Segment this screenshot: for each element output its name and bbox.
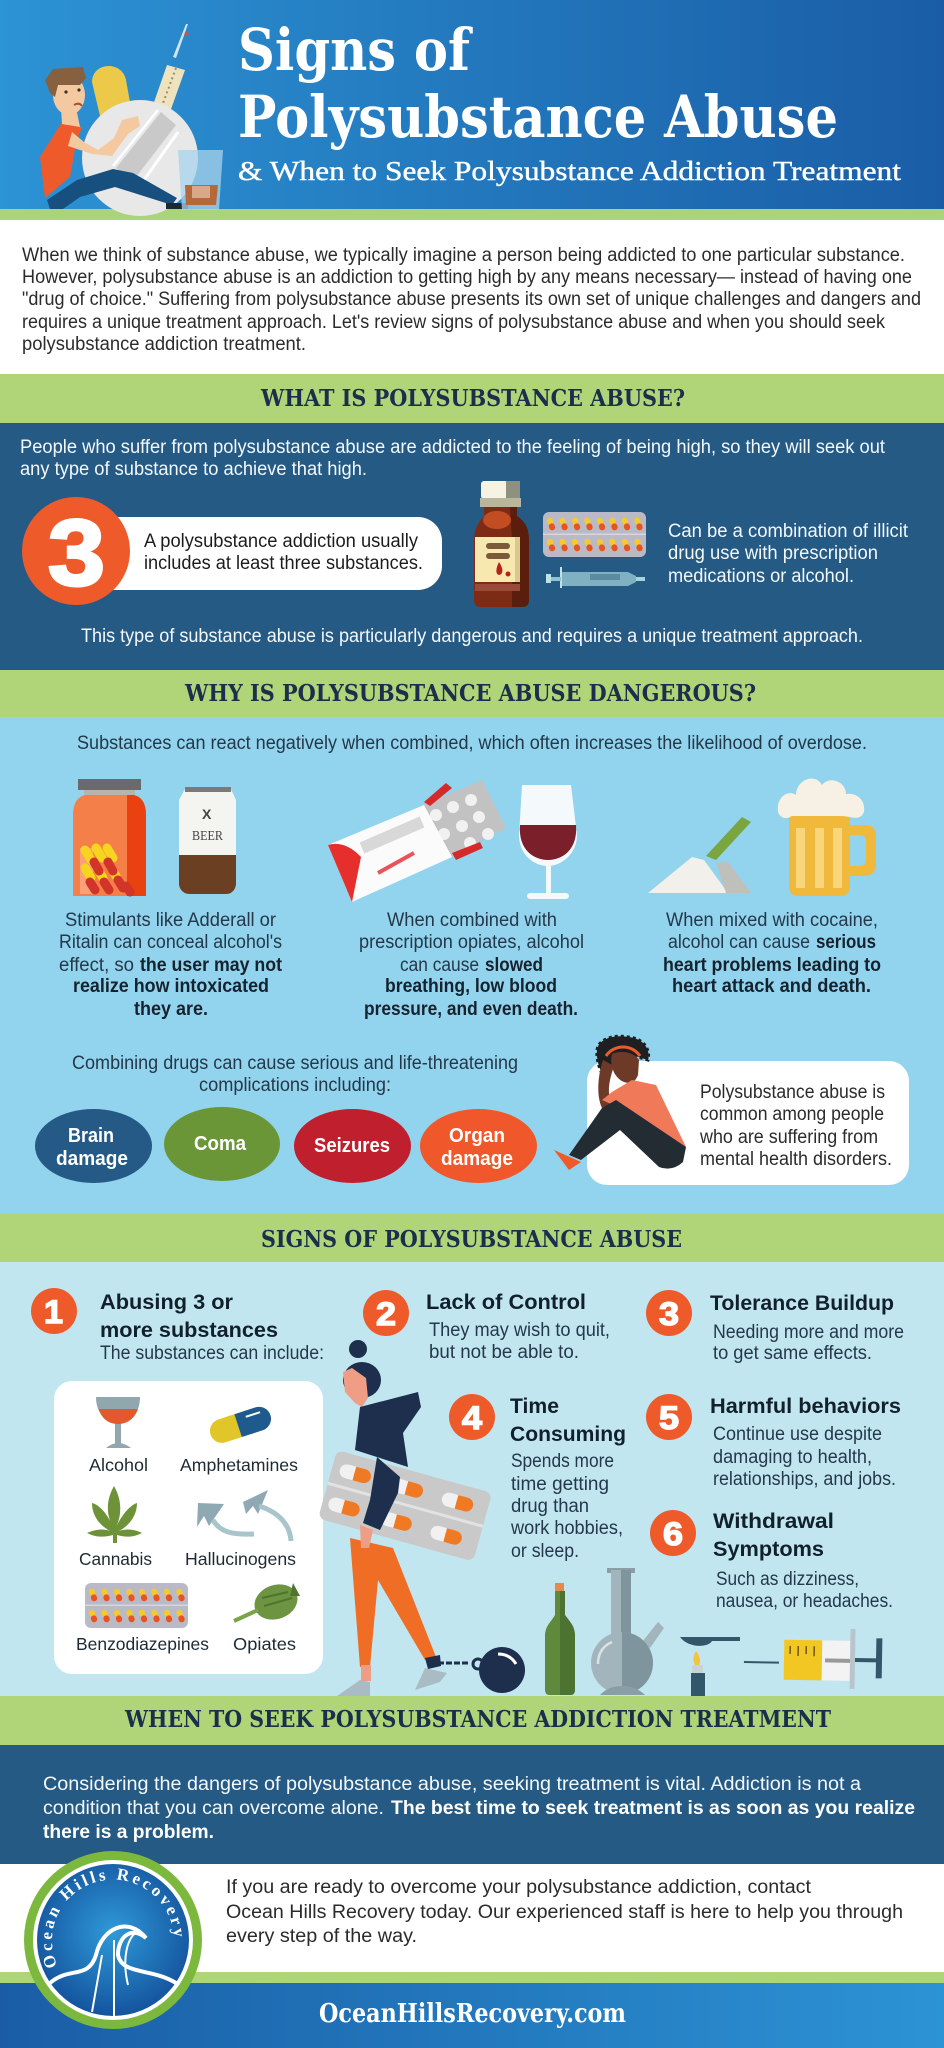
card: substance list: Opiates (233, 1634, 296, 1654)
icon: spoon and lighter (680, 1637, 740, 1696)
sign 6: withdrawal symptoms: Symptoms (713, 1538, 824, 1561)
text: prescription opiates: can cause (400, 955, 479, 976)
bubble: brain damage: damage (56, 1148, 128, 1170)
section heading: when to seek treatment: WHEN TO SEEK POLYSUBSTANCE ADDICTION TREATMENT (124, 1706, 831, 1733)
text: stimulants: Ritalin can conceal alcohol's (59, 932, 282, 953)
callout: mental health disorders: Polysubstance abuse is (700, 1082, 885, 1103)
icon: seated woman (554, 1036, 686, 1170)
sign 5: harmful behaviors: 5 (659, 1400, 679, 1436)
icon: capsule (207, 1404, 274, 1446)
bubble: seizures: Seizures (314, 1135, 390, 1157)
text: stimulants: the user may not (140, 955, 283, 976)
sign 4: time consuming: work hobbies, (510, 1518, 623, 1539)
logo: Ocean Hills Recovery: Ocean Hills Recovery (44, 1868, 182, 1968)
header banner (0, 0, 944, 220)
panel: contact call to action: Ocean Hills Recovery today. Our experienced staff is here to help you through (226, 1902, 903, 1923)
footer with website: OceanHillsRecovery.com (319, 1999, 626, 2029)
bubble: brain damage (35, 1109, 152, 1183)
text: combination of illicit drug use: Can be a combination of illicit (668, 521, 909, 542)
text: combination of illicit drug use: medications or alcohol. (668, 566, 854, 587)
panel: signs of polysubstance abuse (0, 1262, 944, 1696)
icon: cocaine and straw (648, 817, 751, 893)
sign 3: tolerance buildup (646, 1290, 904, 1364)
sign 1: abusing 3 or more substances (31, 1288, 324, 1364)
sign 5: harmful behaviors: relationships, and jobs. (713, 1469, 896, 1490)
sign 6: withdrawal symptoms: nausea, or headaches. (716, 1591, 893, 1612)
sign 2: lack of control: Lack of Control (426, 1291, 586, 1314)
text: stimulants: effect, so (59, 955, 134, 976)
intro panel: requires a unique treatment approach. Let's review signs of polysubstance abuse and when you should seek (22, 312, 885, 333)
card: substance list: Cannabis (79, 1549, 152, 1569)
icon: opiate pills package (328, 780, 506, 902)
icon: blister pack (543, 512, 646, 557)
sign 1: abusing 3 or more substances: The substances can include: (100, 1343, 324, 1364)
icon: medicine bottle (474, 481, 529, 607)
text: prescription opiates: breathing, low blood (385, 976, 557, 997)
text: combining drugs: complications including: (199, 1075, 391, 1096)
sign 2: lack of control: but not be able to. (429, 1342, 579, 1363)
card: substance list: Alcohol (89, 1455, 148, 1475)
icon: man hugging pill with syringe and glass (40, 24, 223, 216)
card: substance list: Amphetamines (180, 1455, 298, 1475)
text: cocaine (663, 910, 881, 997)
bubble: organ damage (420, 1109, 537, 1183)
sign 1: abusing 3 or more substances: 1 (44, 1294, 63, 1330)
text: stimulants: they are. (134, 999, 208, 1020)
sign 2: lack of control: They may wish to quit, (429, 1320, 610, 1341)
text: prescription opiates: prescription opiates, alcohol (359, 932, 584, 953)
sign 6: withdrawal symptoms: 6 (663, 1516, 683, 1552)
panel: what is polysubstance abuse: any type of substance to achieve that high. (20, 459, 367, 480)
panel: when to seek treatment: condition that you can overcome alone. (43, 1798, 384, 1819)
title: Signs of (238, 16, 474, 84)
icon: bong (591, 1568, 664, 1695)
text: cocaine: heart attack and death. (672, 976, 871, 997)
icon: hallucinogen mushrooms (197, 1490, 291, 1541)
intro panel: However, polysubstance abuse is an addiction to getting high by any means necessary— instead of having one (22, 267, 912, 288)
sign 6: withdrawal symptoms (650, 1510, 893, 1612)
section heading: why dangerous (0, 670, 944, 717)
callout: at least three substances: A polysubstance addiction usually (144, 531, 418, 552)
panel: when to seek treatment: The best time to seek treatment is as soon as you realize (391, 1798, 915, 1819)
bubble: seizures (294, 1109, 411, 1183)
section heading: what is polysubstance abuse (0, 374, 944, 423)
icon: beer can: X (202, 806, 212, 822)
text: prescription opiates: pressure, and even death. (364, 999, 578, 1020)
subtitle: & When to Seek Polysubstance Addiction Treatment (238, 156, 902, 186)
text: stimulants: Stimulants like Adderall or (65, 910, 277, 931)
sign 6: withdrawal symptoms: Withdrawal (713, 1510, 834, 1533)
panel: what is polysubstance abuse: People who suffer from polysubstance abuse are addicted to the feeling of being high, so they will seek out (20, 437, 886, 458)
icon: syringe (744, 1627, 883, 1689)
icon: syringe (546, 567, 645, 588)
panel: contact call to action: every step of the way. (226, 1926, 417, 1947)
callout: at least three substances: 3 (48, 500, 105, 605)
bubble: coma (164, 1107, 280, 1181)
text: combination of illicit drug use (668, 521, 909, 587)
callout: mental health disorders (587, 1061, 909, 1185)
bubble: brain damage: Brain (68, 1125, 114, 1147)
panel: why dangerous: Substances can react negatively when combined, which often increases the likelihood of overdose. (77, 733, 867, 754)
sign 3: tolerance buildup: Needing more and more (713, 1322, 904, 1343)
card: substance list (54, 1381, 323, 1674)
sign 2: lack of control (363, 1290, 610, 1363)
text: cocaine: alcohol can cause (668, 932, 810, 953)
card: substance list: Hallucinogens (185, 1549, 296, 1569)
sign 2: lack of control: 2 (376, 1296, 396, 1332)
sign 4: time consuming: drug than (511, 1496, 589, 1517)
callout: mental health disorders: common among people (700, 1104, 884, 1125)
icon: iron ball (473, 1647, 525, 1693)
bubble: organ damage: Organ (449, 1125, 505, 1147)
section heading: signs (0, 1214, 944, 1262)
card: substance list: Benzodiazepines (76, 1634, 209, 1654)
icon: beer mug (778, 778, 876, 896)
icon: cannabis leaf (87, 1486, 142, 1543)
panel: when to seek treatment (0, 1745, 944, 1864)
sign 4: time consuming: time getting (511, 1474, 609, 1495)
sign 4: time consuming: or sleep. (511, 1541, 579, 1562)
panel: when to seek treatment: Considering the dangers of polysubstance abuse, seeking treatment is vital. Addiction is not a (43, 1774, 861, 1795)
icon: alcohol (96, 1397, 140, 1448)
intro panel: "drug of choice." Suffering from polysubstance abuse presents its own set of unique challenges and dangers and (22, 289, 921, 310)
icon: benzodiazepine blister (85, 1583, 188, 1628)
sign 4: time consuming (449, 1394, 626, 1562)
callout: mental health disorders: mental health disorders. (700, 1149, 892, 1170)
text: cocaine: heart problems leading to (663, 955, 881, 976)
icon: beer can (179, 787, 236, 894)
icon: pill bottle (73, 779, 146, 896)
footer with website (0, 1972, 944, 2048)
panel: why dangerous (0, 717, 944, 1214)
intro panel: When we think of substance abuse, we typically imagine a person being addicted to one particular substance. (22, 245, 905, 266)
icon: wine glass (519, 785, 577, 899)
section heading: what is polysubstance abuse: WHAT IS POLYSUBSTANCE ABUSE? (260, 385, 685, 412)
title: Polysubstance Abuse (238, 83, 838, 151)
text: stimulants (59, 910, 283, 1020)
section heading: signs: SIGNS OF POLYSUBSTANCE ABUSE (261, 1226, 682, 1253)
text: prescription opiates (359, 910, 584, 1020)
sign 5: harmful behaviors: damaging to health, (713, 1447, 872, 1468)
sign 4: time consuming: Time (510, 1395, 559, 1418)
text: prescription opiates: slowed (485, 955, 543, 976)
icon: wine bottle (545, 1583, 575, 1695)
sign 4: time consuming: 4 (462, 1400, 482, 1436)
sign 5: harmful behaviors (646, 1394, 901, 1490)
text: cocaine: When mixed with cocaine, (666, 910, 878, 931)
callout: at least three substances: includes at least three substances. (144, 553, 423, 574)
text: dangerous type: This type of substance abuse is particularly dangerous and requires a unique treatment approach. (81, 626, 863, 647)
sign 4: time consuming: Spends more (511, 1451, 614, 1472)
title (238, 16, 838, 151)
sign 4: time consuming: Consuming (510, 1423, 626, 1446)
sign 1: abusing 3 or more substances: Abusing 3 or (100, 1291, 233, 1314)
panel: contact call to action: If you are ready to overcome your polysubstance addiction, contact (226, 1877, 812, 1898)
section heading: when to seek treatment (0, 1696, 944, 1745)
sign 3: tolerance buildup: Tolerance Buildup (710, 1292, 894, 1315)
panel: contact call to action (0, 1864, 944, 1972)
text: cocaine: serious (816, 932, 876, 953)
text: combining drugs: Combining drugs can cause serious and life-threatening (72, 1053, 518, 1074)
panel: what is polysubstance abuse (0, 423, 944, 670)
sign 3: tolerance buildup: 3 (659, 1296, 679, 1332)
text: combination of illicit drug use: drug use with prescription (668, 543, 878, 564)
intro panel (0, 220, 944, 374)
panel: when to seek treatment: there is a problem. (43, 1822, 214, 1843)
sign 5: harmful behaviors: Harmful behaviors (710, 1395, 901, 1418)
text: prescription opiates: When combined with (387, 910, 557, 931)
icon: opium poppy pod (234, 1579, 302, 1625)
sign 6: withdrawal symptoms: Such as dizziness, (716, 1569, 859, 1590)
text: stimulants: realize how intoxicated (73, 976, 269, 997)
sign 3: tolerance buildup: to get same effects. (713, 1343, 872, 1364)
sign 5: harmful behaviors: Continue use despite (713, 1424, 882, 1445)
callout: mental health disorders: who are suffering from (699, 1127, 878, 1148)
section heading: why dangerous: WHY IS POLYSUBSTANCE ABUSE DANGEROUS? (184, 680, 756, 707)
icon: beer can: BEER (192, 829, 224, 844)
sign 1: abusing 3 or more substances: more substances (100, 1319, 278, 1342)
bubble: coma: Coma (194, 1133, 247, 1155)
illustration: woman carrying blister pack with ball and chain (318, 1340, 492, 1696)
callout: at least three substances (22, 497, 442, 605)
intro panel: polysubstance addiction treatment. (22, 334, 306, 355)
logo: Ocean Hills Recovery (24, 1851, 202, 2029)
text: combining drugs (72, 1053, 518, 1096)
bubble: organ damage: damage (441, 1148, 513, 1170)
